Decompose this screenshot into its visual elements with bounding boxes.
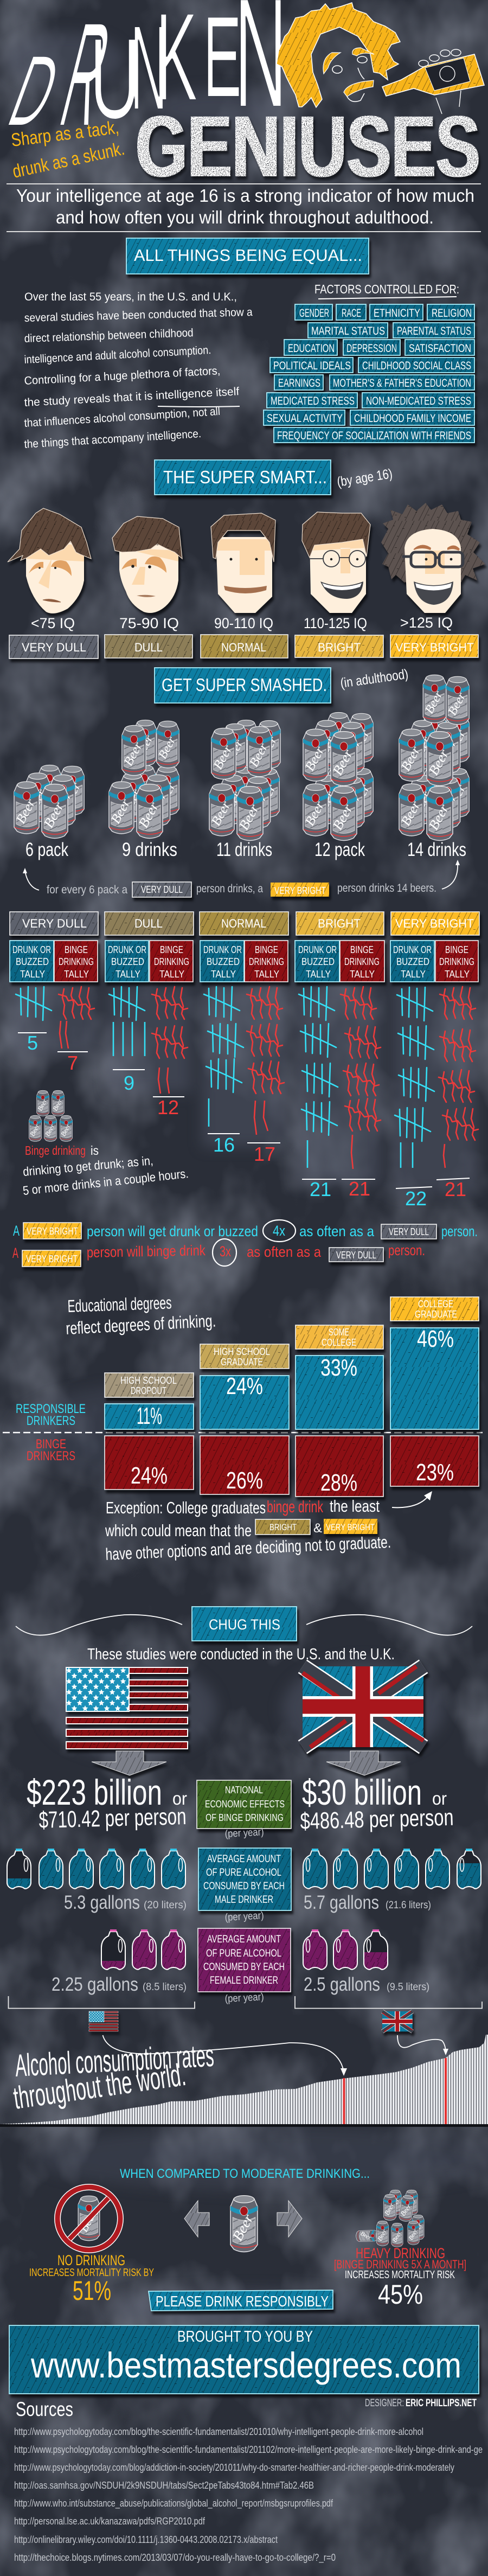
statement: 3x binge drink: person will binge drink — [87, 1242, 206, 1261]
designer credit — [365, 2398, 477, 2409]
label: economic effects: OF BINGE DRINKING — [206, 1812, 284, 1823]
text block: study description — [24, 291, 253, 451]
statement: 3x binge drink: person. — [388, 1242, 425, 1258]
designer credit: DESIGNER: — [365, 2398, 404, 2409]
column: very dull: TALLY — [20, 969, 45, 980]
statement: 4x drunk or buzzed: VERY BRIGHT — [27, 1226, 78, 1237]
arrow: US down — [92, 1751, 166, 1775]
whiskey bottle — [382, 54, 484, 96]
legend: responsible drinkers: DRINKERS — [27, 1414, 75, 1428]
column: some college — [296, 1325, 383, 1497]
heading: compared to moderate drinking: WHEN COMPARED TO MODERATE DRINKING... — [120, 2166, 370, 2181]
IQ labels: >125 IQ — [400, 615, 453, 631]
title: Geniuses: GENIUSES — [136, 98, 480, 195]
column: college graduate: GRADUATE — [415, 1309, 457, 1320]
column: dull: BUZZED — [111, 956, 144, 967]
exception note: BRIGHT — [269, 1522, 297, 1532]
header: bright: BRIGHT — [318, 917, 361, 930]
column: some college: 28% — [320, 1469, 357, 1496]
moderate drinking can — [229, 2196, 258, 2252]
header: bright — [296, 912, 384, 935]
subtitle — [7, 183, 481, 232]
stat: US economic cost: or — [172, 1788, 187, 1808]
column: very dull: BUZZED — [16, 956, 49, 967]
column: high school graduate: 26% — [226, 1467, 263, 1494]
column: bright: DRINKING — [344, 956, 380, 967]
cans: 9 drinks — [108, 720, 179, 839]
tag: marital status: MARITAL STATUS — [311, 325, 385, 337]
tagline: sharp as a tack: Sharp as a tack, — [10, 117, 120, 151]
tagline: sharp as a tack: drunk as a skunk. — [11, 138, 126, 182]
label: economic effects: (per year) — [224, 1826, 264, 1840]
stat: heavy drinking — [334, 2245, 466, 2310]
tag: satisfaction: SATISFACTION — [409, 342, 471, 355]
IQ labels: 75-90 IQ — [119, 615, 179, 631]
column: bright: TALLY — [306, 969, 331, 980]
tally: bright, 21 drunk and 21 binge — [299, 987, 381, 1200]
tally: dull, 9 drunk and 12 binge: 12 — [157, 1096, 179, 1118]
tag: education: EDUCATION — [288, 342, 335, 355]
legend: responsible drinkers — [16, 1402, 86, 1428]
stat: UK male gallons: (21.6 liters) — [386, 1900, 431, 1911]
column: high school dropout: 24% — [131, 1462, 168, 1489]
column: dull: DRUNK OR — [108, 944, 146, 955]
heading: get super smashed: (in adulthood) — [339, 667, 409, 691]
header: very bright — [391, 912, 479, 935]
column: very dull: TALLY — [64, 969, 89, 980]
cans: 14 drinks — [399, 675, 469, 841]
heading: all things being equal — [126, 238, 369, 274]
column: normal: TALLY — [211, 969, 236, 980]
exception note — [105, 1491, 432, 1564]
tag: satisfaction — [405, 340, 474, 355]
column: very bright — [390, 941, 478, 982]
exception note: Exception: College graduates — [106, 1498, 266, 1517]
column: bright: BUZZED — [301, 956, 335, 967]
tagline: sharp as a tack — [10, 117, 126, 182]
cans: 6 pack — [14, 765, 84, 839]
callout: six pack comparison: for every 6 pack a — [47, 884, 127, 896]
binge drinking definition: is — [91, 1143, 99, 1158]
stat: US female gallons: (8.5 liters) — [143, 1981, 187, 1993]
face: very bright — [381, 503, 485, 613]
statement: 3x binge drink: as often as a — [247, 1244, 322, 1260]
tag: ethnicity: ETHNICITY — [374, 307, 420, 319]
IQ labels: <75 IQ — [31, 615, 75, 631]
flag: United States — [66, 1667, 188, 1749]
exception note: which could mean that the — [105, 1521, 252, 1540]
chart: world alcohol consumption — [0, 2034, 488, 2127]
tag: medicated stress — [267, 393, 357, 408]
column: some college: COLLEGE — [322, 1337, 356, 1348]
can count labels: 11 drinks — [216, 839, 272, 860]
label: male drinker consumption: OF PURE ALCOHOL — [206, 1867, 281, 1878]
can count labels: 6 pack — [25, 839, 68, 860]
label: female drinker consumption: CONSUMED BY EACH — [203, 1961, 285, 1973]
can count labels: 9 drinks — [122, 839, 177, 860]
legend: binge drinkers: BINGE — [36, 1437, 66, 1452]
flag: United Kingdom — [303, 1666, 423, 1747]
column: college graduate: COLLEGE — [418, 1299, 453, 1309]
stat: UK economic cost — [300, 1772, 454, 1834]
box: dull — [105, 635, 192, 658]
column: dull — [105, 941, 193, 982]
sources — [14, 2398, 483, 2564]
jugs: US male drinkers — [6, 1849, 185, 1890]
tally: bright, 21 drunk and 21 binge: 21 — [310, 1178, 331, 1200]
tag: political ideals — [270, 357, 353, 373]
sources: http://www.who.int/substance_abuse/publications/global_alcohol_report/msbgsruprofiles.pdf — [14, 2498, 333, 2509]
tally: very bright, 22 drunk and 21 binge — [395, 987, 478, 1210]
IQ labels: 90-110 IQ — [214, 615, 273, 631]
box: normal: NORMAL — [221, 641, 266, 654]
tally: very dull, 5 drunk and 7 binge: 5 — [27, 1032, 38, 1054]
box: normal — [201, 635, 288, 658]
heading: chug this: CHUG THIS — [209, 1616, 280, 1633]
header: normal — [200, 912, 288, 935]
header: very dull: VERY DULL — [22, 917, 87, 930]
tally: dull, 9 drunk and 12 binge: 9 — [124, 1072, 134, 1094]
legend: binge drinkers: DRINKERS — [27, 1449, 75, 1463]
exception note: have other options and are deciding not to graduate. — [105, 1532, 391, 1564]
binge drinking definition: 5 or more drinks in a couple hours. — [22, 1166, 189, 1198]
wild golden hair — [277, 3, 400, 107]
sponsor panel: BROUGHT TO YOU BY — [177, 2328, 313, 2345]
column: dull: BINGE — [160, 944, 183, 955]
heading: get super smashed: GET SUPER SMASHED. — [162, 675, 327, 695]
box: very dull: VERY DULL — [22, 641, 86, 654]
binge drinking definition: Binge drinking — [25, 1143, 86, 1158]
text: educational degrees: reflect degrees of drinking. — [65, 1311, 216, 1338]
column: very bright: TALLY — [445, 969, 470, 980]
can count labels: 12 pack — [314, 839, 365, 860]
header: dull — [105, 912, 194, 935]
statement: 3x binge drink: 3x — [220, 1243, 231, 1260]
tag: sexual activity: SEXUAL ACTIVITY — [267, 412, 343, 425]
label: female drinker consumption: FEMALE DRINKER — [210, 1975, 278, 1986]
heading: the super smart: THE SUPER SMART... — [163, 467, 327, 487]
arrow: right — [277, 2201, 302, 2237]
box: very bright — [390, 635, 478, 657]
column: high school graduate — [200, 1344, 289, 1494]
heading: the super smart — [155, 460, 394, 495]
stat: no drinking — [29, 2252, 154, 2306]
box: bright — [295, 635, 383, 657]
binge drinking definition — [22, 1090, 189, 1198]
label: economic effects: ECONOMIC EFFECTS — [205, 1799, 285, 1810]
tally: normal, 16 drunk and 17 binge: 17 — [254, 1143, 275, 1165]
callout: six pack comparison: VERY DULL — [141, 884, 183, 895]
column: some college: SOME — [329, 1327, 349, 1338]
column: bright: DRUNK OR — [298, 944, 337, 955]
tag: marital status — [308, 323, 388, 338]
column: very bright: TALLY — [401, 969, 426, 980]
title: Drunken — [0, 0, 287, 156]
tally: very bright, 22 drunk and 21 binge: 21 — [445, 1178, 466, 1200]
header: very dull — [10, 912, 98, 935]
category headers for tally — [10, 912, 479, 935]
tag: sexual activity — [264, 410, 345, 425]
tally: normal, 16 drunk and 17 binge — [204, 987, 284, 1165]
column: dull: DRINKING — [154, 956, 189, 967]
title: Drunken: N — [130, 2, 168, 134]
text block: study description: the things that accompany intelligence. — [24, 427, 202, 451]
column: dull: TALLY — [115, 969, 140, 980]
small flag: US — [89, 2011, 118, 2031]
tag: religion — [427, 304, 474, 320]
column: dull: TALLY — [159, 969, 184, 980]
title: Drunken: U — [89, 15, 140, 142]
tag: political ideals: POLITICAL IDEALS — [273, 360, 351, 372]
stat: heavy drinking: 45% — [378, 2279, 423, 2310]
sponsor panel — [9, 2325, 479, 2394]
tally: very dull, 5 drunk and 7 binge — [16, 987, 94, 1074]
arrow: US to chart bar — [103, 2035, 347, 2076]
heading: alcohol consumption rates: Alcohol consumption rates — [14, 2038, 215, 2083]
column: normal: TALLY — [254, 969, 279, 980]
no drinking icon — [57, 2187, 120, 2250]
statement: 4x drunk or buzzed: person will get drunk or buzzed — [87, 1223, 258, 1239]
heavy drinking cans — [356, 2190, 424, 2247]
tag: depression: DEPRESSION — [346, 342, 397, 355]
stat: heavy drinking: HEAVY DRINKING — [356, 2245, 445, 2261]
text block: study description: Over the last 55 years, in the U.S. and U.K., — [24, 291, 237, 303]
stat: UK female gallons: (9.5 liters) — [387, 1981, 429, 1993]
statement: 4x drunk or buzzed: A — [13, 1223, 20, 1239]
statement: 4x drunk or buzzed: 4x — [273, 1223, 285, 1239]
tag: medicated stress: MEDICATED STRESS — [271, 395, 355, 407]
column: college graduate: 46% — [417, 1326, 454, 1352]
face: dull — [112, 516, 182, 613]
tag: education — [284, 340, 337, 355]
callout: six pack comparison — [23, 860, 460, 897]
tag: gender: GENDER — [299, 307, 329, 319]
column: bright — [295, 941, 384, 982]
column: high school dropout: 11% — [137, 1403, 162, 1429]
icon: five can stack — [28, 1090, 73, 1141]
heading: get super smashed — [155, 667, 409, 703]
tally column headers — [10, 941, 478, 982]
column: normal: DRINKING — [249, 956, 284, 967]
can count labels — [25, 839, 466, 860]
exception note: & — [313, 1521, 322, 1536]
column: very dull: DRINKING — [59, 956, 94, 967]
box: very bright: VERY BRIGHT — [395, 641, 474, 654]
arrow: left — [184, 2201, 209, 2237]
label: economic effects — [197, 1780, 291, 1840]
stat: UK female gallons: 2.5 gallons — [304, 1974, 380, 1995]
statement: 3x binge drink — [12, 1239, 425, 1267]
column: very dull — [10, 941, 98, 982]
text block: study description: several studies have been conducted that show a — [24, 306, 253, 324]
tally: very bright, 22 drunk and 21 binge: 22 — [405, 1187, 427, 1210]
factors controlled for — [264, 282, 474, 443]
tag: race: RACE — [342, 307, 361, 319]
label: male drinker consumption: MALE DRINKER — [215, 1894, 273, 1906]
jugs: US female drinkers — [100, 1929, 185, 1972]
column: very bright: DRINKING — [439, 956, 474, 967]
label: male drinker consumption: (per year) — [224, 1910, 264, 1923]
label: female drinker consumption: AVERAGE AMOUNT — [207, 1934, 281, 1945]
column: college graduate: 23% — [416, 1459, 454, 1486]
box: bright: BRIGHT — [318, 641, 361, 654]
tally: dull, 9 drunk and 12 binge — [109, 987, 188, 1118]
label: male drinker consumption: CONSUMED BY EACH — [203, 1881, 285, 1892]
IQ labels: 110-125 IQ — [304, 615, 367, 631]
face: bright — [302, 512, 370, 613]
statement: 3x binge drink: A — [12, 1245, 18, 1261]
chart: responsible and binge drinkers by education — [3, 1297, 483, 1497]
callout: please drink responsibly: PLEASE DRINK RESPONSIBLY — [156, 2293, 329, 2310]
callout: six pack comparison: VERY BRIGHT — [274, 885, 326, 896]
tag: ethnicity — [370, 304, 423, 320]
heading: the super smart: (by age 16) — [336, 466, 394, 490]
sources: http://oas.samhsa.gov/NSDUH/2k9NSDUH/tabs/Sect2peTabs43to84.htm#Tab2.46B — [14, 2480, 314, 2491]
stat: US economic cost: $223 billion — [27, 1772, 162, 1812]
column: very bright: BINGE — [445, 944, 468, 955]
column: high school dropout: HIGH SCHOOL — [120, 1375, 177, 1386]
legend: responsible drinkers: RESPONSIBLE — [16, 1402, 86, 1416]
exception note: binge drink — [267, 1497, 323, 1516]
header: normal: NORMAL — [221, 917, 266, 930]
column: high school dropout — [105, 1373, 194, 1490]
text: educational degrees: Educational degrees — [67, 1293, 172, 1316]
column: bright: BINGE — [350, 944, 374, 955]
sources: Sources — [16, 2398, 73, 2420]
tag: depression — [343, 340, 400, 355]
text block: study description: Controlling for a huge plethora of factors, — [24, 365, 221, 387]
column: very dull: DRUNK OR — [12, 944, 51, 955]
illustration: Einstein drinking from a bottle — [277, 3, 484, 114]
column: very bright: DRUNK OR — [393, 944, 432, 955]
sources: http://thechoice.blogs.nytimes.com/2013/03/07/do-you-really-have-to-go-to-college/?_r=0 — [14, 2552, 336, 2564]
brackets to small flags — [9, 1996, 482, 2008]
column: bright: TALLY — [350, 969, 375, 980]
sources: http://onlinelibrary.wiley.com/doi/10.1111/j.1360-0443.2008.02173.x/abstract — [14, 2534, 278, 2545]
text block: study description: that influences alcohol consumption, not all — [24, 405, 221, 430]
subtitle: Your intelligence at age 16 is a strong indicator of how much — [16, 186, 474, 206]
statement: 4x drunk or buzzed — [13, 1220, 478, 1242]
statement: 3x binge drink: VERY DULL — [336, 1250, 376, 1261]
stat: no drinking: NO DRINKING — [57, 2252, 125, 2268]
tag: earnings — [274, 375, 323, 390]
label: female drinker consumption: OF PURE ALCOHOL — [206, 1948, 281, 1959]
text block: study description: intelligence and adult alcohol consumption. — [24, 344, 211, 366]
binge drinking definition: drinking to get drunk; as in, — [22, 1153, 154, 1179]
heading: alcohol consumption rates: throughout the world. — [11, 2057, 188, 2116]
text: educational degrees — [65, 1293, 216, 1338]
jugs: UK female drinkers — [303, 1929, 389, 1972]
callout: six pack comparison: person drinks 14 beers. — [337, 882, 436, 894]
heading: alcohol consumption rates — [11, 2038, 215, 2116]
column: some college: 33% — [320, 1354, 357, 1381]
heading: all things being equal: ALL THINGS BEING EQUAL... — [134, 246, 362, 265]
statement: 4x drunk or buzzed: VERY DULL — [389, 1226, 429, 1237]
stat: US male gallons: 5.3 gallons — [64, 1892, 140, 1913]
header: very bright: VERY BRIGHT — [395, 917, 474, 930]
heading: chug this — [16, 1607, 472, 1641]
column: high school graduate: GRADUATE — [221, 1357, 263, 1367]
tally: bright, 21 drunk and 21 binge: 21 — [349, 1178, 370, 1200]
header: dull: DULL — [134, 917, 163, 930]
column: normal: DRUNK OR — [203, 944, 242, 955]
face: normal — [211, 513, 275, 613]
stat: US female gallons: 2.25 gallons — [52, 1974, 138, 1995]
can count labels: 14 drinks — [407, 839, 466, 860]
arrow: UK to chart bar — [397, 2035, 448, 2055]
column: high school graduate: HIGH SCHOOL — [214, 1346, 270, 1357]
column: high school dropout: DROPOUT — [131, 1385, 166, 1396]
label: male drinker consumption — [198, 1848, 291, 1923]
column: very dull: BINGE — [65, 944, 88, 955]
box: dull: DULL — [134, 641, 163, 654]
face: very dull — [8, 508, 91, 613]
tag: earnings: EARNINGS — [278, 377, 320, 389]
subtitle: and how often you will drink throughout adulthood. — [56, 207, 434, 227]
stat: UK economic cost: or — [432, 1788, 447, 1808]
statement: 4x drunk or buzzed: as often as a — [299, 1223, 375, 1239]
small flag: UK — [382, 2011, 413, 2031]
tally: normal, 16 drunk and 17 binge: 16 — [213, 1134, 235, 1156]
tag: religion: RELIGION — [432, 307, 472, 319]
sources: http://personal.lse.ac.uk/kanazawa/pdfs/RGP2010.pdf — [14, 2516, 206, 2527]
box: very dull — [9, 635, 98, 659]
column: normal: BUZZED — [207, 956, 240, 967]
cans: 11 drinks — [209, 720, 280, 841]
exception note: VERY BRIGHT — [326, 1522, 375, 1532]
label: female drinker consumption — [198, 1928, 291, 2005]
stat: UK economic cost: $30 billion — [302, 1772, 422, 1812]
text block: study description: direct relationship between childhood — [24, 327, 194, 345]
stat: US economic cost — [27, 1772, 187, 1833]
stat: no drinking: INCREASES MORTALITY RISK BY — [29, 2267, 154, 2279]
stat: UK male gallons: 5.7 gallons — [304, 1892, 379, 1913]
IQ labels — [31, 615, 453, 631]
text block: study description: the study reveals that it is intelligence itself — [24, 385, 240, 409]
label: male drinker consumption: AVERAGE AMOUNT — [207, 1853, 281, 1865]
column: college graduate — [390, 1297, 479, 1486]
tag: gender — [295, 304, 332, 320]
column: very bright: BUZZED — [396, 956, 429, 967]
stat: US economic cost: $710.42 per person — [38, 1804, 187, 1833]
callout: please drink responsibly — [149, 2290, 333, 2311]
column: normal — [200, 941, 288, 982]
label: female drinker consumption: (per year) — [224, 1991, 264, 2005]
label: economic effects: NATIONAL — [225, 1785, 263, 1795]
column: normal: BINGE — [255, 944, 278, 955]
tally: very dull, 5 drunk and 7 binge: 7 — [67, 1052, 78, 1074]
cans: 12 pack — [303, 712, 373, 841]
stat: US male gallons: (20 liters) — [144, 1900, 187, 1911]
arrow: UK down — [326, 1751, 401, 1775]
column: high school graduate: 24% — [226, 1373, 263, 1399]
text: studies location: These studies were conducted in the U.S. and the U.K. — [87, 1646, 395, 1663]
exception note: the least — [330, 1497, 380, 1516]
legend: binge drinkers — [27, 1437, 75, 1463]
IQ category boxes — [9, 635, 478, 659]
callout: six pack comparison: person drinks, a — [196, 883, 263, 895]
stat: no drinking: 51% — [73, 2275, 111, 2306]
tag: parental status — [393, 323, 474, 338]
tag: race — [336, 304, 366, 320]
statement: 3x binge drink: VERY BRIGHT — [26, 1254, 78, 1264]
jugs: UK male drinkers — [303, 1849, 482, 1890]
